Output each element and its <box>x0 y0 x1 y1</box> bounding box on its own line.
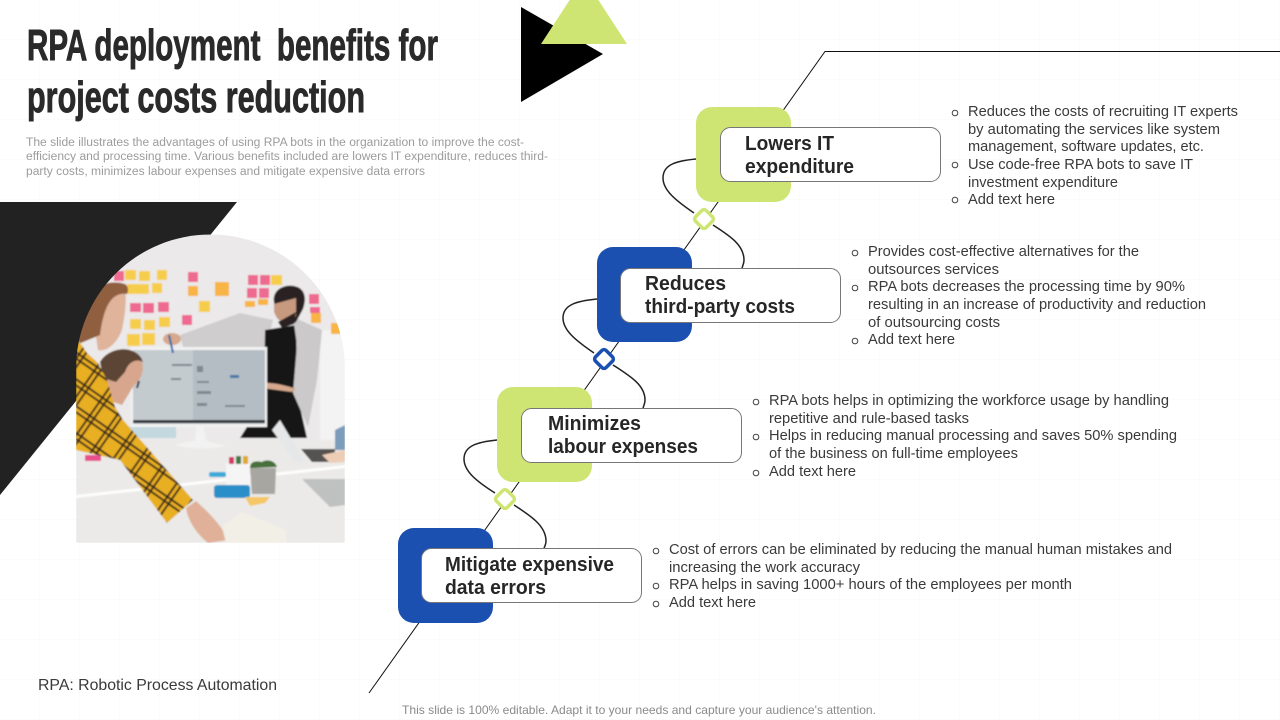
details 1: Use code-free RPA bots to save IT <box>968 157 1193 173</box>
label text 4: Mitigate expensive <box>445 554 614 576</box>
accent square 2 <box>597 247 692 342</box>
step 1: lowers IT expenditure <box>663 107 940 268</box>
description text: The slide illustrates the advantages of using RPA bots in the organization to improve the cost- <box>26 137 524 149</box>
details 1: investment expenditure <box>968 175 1118 191</box>
woman <box>95 283 126 350</box>
details 4: Cost of errors can be eliminated by reducing the manual human mistakes and <box>669 542 1172 558</box>
label text 2 <box>645 273 795 318</box>
details 4 <box>653 542 1172 611</box>
description text: efficiency and processing time. Various benefits included are lowers IT expenditure, reduces third- <box>26 151 548 163</box>
title: project costs reduction <box>27 73 365 122</box>
details 4: Add text here <box>669 595 756 611</box>
label text 4 <box>445 554 614 599</box>
label text 3 <box>548 413 698 458</box>
label box 1 <box>720 128 940 182</box>
details 1 <box>952 104 1238 208</box>
title <box>27 21 438 122</box>
details 1: Reduces the costs of recruiting IT experts <box>968 104 1238 120</box>
photo: team reviewing a screen <box>76 234 345 543</box>
details 1: management, software updates, etc. <box>968 139 1204 155</box>
label text 3: labour expenses <box>548 436 698 458</box>
crouching man head <box>106 360 144 406</box>
step 2: reduces third-party costs <box>563 247 840 408</box>
label text 3: Minimizes <box>548 413 641 435</box>
notebook <box>222 530 228 542</box>
dark corner shape <box>0 202 237 495</box>
label text 1 <box>745 133 854 178</box>
details 3: RPA bots helps in optimizing the workforce usage by handling <box>769 393 1169 409</box>
decorative triangles <box>521 0 627 102</box>
details 3 <box>753 393 1177 480</box>
accent square 1 <box>696 107 791 202</box>
details 3: repetitive and rule-based tasks <box>769 411 969 427</box>
description text: party costs, minimizes labour expenses and mitigate expensive data errors <box>26 166 425 178</box>
details 2: Provides cost-effective alternatives for the <box>868 244 1139 260</box>
details 3: of the business on full-time employees <box>769 446 1018 462</box>
accent square 3 <box>497 387 592 482</box>
standing man <box>163 286 322 438</box>
details 2: outsources services <box>868 262 999 278</box>
label box 2 <box>620 268 840 322</box>
connector curve 1 <box>663 159 744 268</box>
connector curve 2 <box>563 299 645 408</box>
step 3: minimizes labour expenses <box>464 387 742 548</box>
connector curve 3 <box>464 440 546 548</box>
diamond node 2 <box>593 348 615 370</box>
label text 1: Lowers IT <box>745 133 834 155</box>
label box 4 <box>422 548 642 602</box>
diamond node 1 <box>693 208 715 230</box>
label text 1: expenditure <box>745 156 854 178</box>
accent square 4 <box>398 528 493 623</box>
label text 2: Reduces <box>645 273 726 295</box>
label text 2: third-party costs <box>645 296 795 318</box>
details 3: Helps in reducing manual processing and saves 50% spending <box>769 428 1177 444</box>
monitor <box>131 347 267 427</box>
details 2: RPA bots decreases the processing time by 90% <box>868 279 1185 295</box>
label box 3 <box>522 408 742 462</box>
description text <box>26 137 548 178</box>
details 4: RPA helps in saving 1000+ hours of the employees per month <box>669 577 1072 593</box>
details 1: by automating the services like system <box>968 122 1220 138</box>
diamond node 3 <box>494 488 516 510</box>
footnote: RPA: Robotic Process Automation <box>38 677 277 694</box>
desk items <box>226 463 250 487</box>
title: RPA deployment benefits for <box>27 21 438 70</box>
connector line: diagonal path <box>369 52 1280 693</box>
details 3: Add text here <box>769 464 856 480</box>
details 2 <box>852 244 1206 348</box>
label text 4: data errors <box>445 577 546 599</box>
details 2: of outsourcing costs <box>868 315 1000 331</box>
details 1: Add text here <box>968 192 1055 208</box>
details 2: Add text here <box>868 332 955 348</box>
step 4: mitigate expensive data errors <box>398 528 642 623</box>
details 4: increasing the work accuracy <box>669 560 861 576</box>
details 2: resulting in an increase of productivity and reduction <box>868 297 1206 313</box>
desk <box>76 440 345 543</box>
footer note: This slide is 100% editable. Adapt it to your needs and capture your audience's attention. <box>402 703 876 717</box>
